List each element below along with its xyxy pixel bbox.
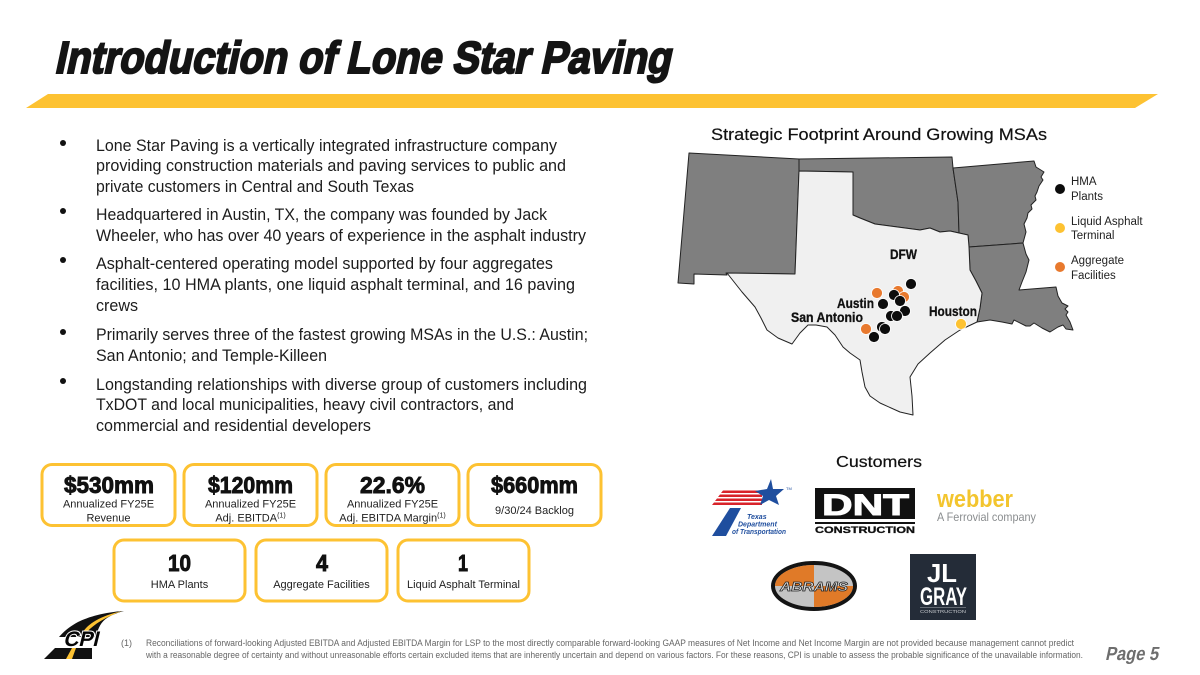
page number: Page 5 [1104,644,1162,665]
legend: aggregate facilities: Facilities [1071,270,1116,282]
bullet 1: private customers in Central and South Texas [96,177,414,196]
logo: JL Gray: CONSTRUCTION [920,609,966,614]
bullet 2 [60,205,586,245]
stat: revenue: $530mm [64,472,154,498]
customers heading: Customers [836,454,922,471]
bullet 3: facilities, 10 HMA plants, one liquid asphalt terminal, and 16 paving [96,275,575,294]
stat: adj. EBITDA margin: 22.6% [360,472,425,498]
map: city labels: Austin [837,295,874,311]
legend: liquid asphalt terminal [1055,216,1143,242]
footnote: with a reasonable degree of certainty and without unreasonable efforts certain excluded items that are inherently uncertain and depend on various factors. For these reasons, CPI is unable to assess the probable significance of the unavailable information. [145,650,1083,660]
map legend [1055,176,1143,282]
legend: aggregate facilities: Aggregate [1071,255,1124,267]
legend: aggregate facilities [1055,255,1124,282]
stat: adj. EBITDA: (1) [277,512,286,520]
stat: revenue [42,464,175,526]
stat: backlog: 9/30/24 Backlog [495,505,574,517]
bullet 3 [60,254,575,315]
footnote [121,638,1083,660]
map: city labels: Houston [929,303,977,319]
legend: liquid asphalt terminal: Liquid Asphalt [1071,216,1143,228]
stat: liquid asphalt terminal: 1 [458,550,468,576]
map [678,153,1073,415]
stat cards row 2 [114,540,529,601]
logo: Abrams [773,563,855,609]
stat: liquid asphalt terminal: Liquid Asphalt Terminal [407,579,520,591]
stat: adj. EBITDA margin [326,464,459,526]
stat: liquid asphalt terminal [398,540,529,601]
logo: TxDOT: Texas [747,514,767,521]
logo: JL Gray: GRAY [920,583,967,611]
stat: HMA plants [114,540,245,601]
bullet 4 [60,325,588,365]
logo: TxDOT: Department [738,522,778,528]
stat: aggregate facilities: 4 [316,550,328,576]
bullet 1: Lone Star Paving is a vertically integrated infrastructure company [96,136,557,155]
legend: HMA plants: HMA [1071,176,1097,188]
CPI logo [44,611,124,659]
bullet 4: Primarily serves three of the fastest growing MSAs in the U.S.: Austin; [96,325,588,344]
map heading: Strategic Footprint Around Growing MSAs [711,125,1047,144]
stat: backlog: $660mm [491,472,578,498]
map: neighbouring states [678,153,1073,332]
stat: HMA plants: HMA Plants [151,579,209,591]
logo: TxDOT: of Transportation [732,529,786,536]
map: yellow terminal dot [956,318,966,330]
stat: adj. EBITDA [184,464,317,526]
customer logos [712,479,1036,620]
stat: adj. EBITDA: Adj. EBITDA [215,512,277,524]
stat: revenue: Revenue [86,512,131,524]
stat: aggregate facilities: Aggregate Facilities [273,579,370,591]
bullet 3: Asphalt-centered operating model supported by four aggregates [96,254,553,273]
bullet 3: crews [96,296,138,315]
bullet 5: Longstanding relationships with diverse group of customers including [96,375,587,394]
bullet 1 [60,136,566,196]
logo: JL Gray [910,554,976,620]
bullet list [60,136,588,435]
stat: HMA plants: 10 [168,550,191,576]
stat: adj. EBITDA: Annualized FY25E [205,498,296,510]
stat: aggregate facilities [256,540,387,601]
stat: adj. EBITDA margin: Annualized FY25E [347,498,438,510]
logo: webber [936,486,1036,524]
logo: Abrams: ABRAMS [779,579,848,594]
bullet 4: San Antonio; and Temple-Killeen [96,346,327,365]
bullet 2: Headquartered in Austin, TX, the company was founded by Jack [96,205,547,224]
logo: webber: A Ferrovial company [937,510,1036,524]
logo: TxDOT: TM [786,486,792,491]
footnote: Reconciliations of forward-looking Adjusted EBITDA and Adjusted EBITDA Margin for LSP to the most directly comparable forward-looking GAAP measures of Net Income and Net Income Margin are not provided because management cannot predict [146,638,1074,648]
logo: DNT Construction: DNT [822,489,909,522]
stat: revenue: Annualized FY25E [63,498,154,510]
logo: DNT Construction: CONSTRUCTION [815,525,915,535]
bullet 5: TxDOT and local municipalities, heavy civil contractors, and [96,395,514,414]
CPI logo: CPI [62,627,103,651]
logo: DNT Construction [815,488,915,535]
stat: adj. EBITDA margin: Adj. EBITDA Margin [339,512,437,524]
bullet 5 [60,375,587,435]
legend: HMA plants [1055,176,1103,203]
map: city labels [791,246,977,325]
title accent bar [26,94,1158,108]
map: orange aggregate dots [860,286,910,334]
stat cards row 1 [42,464,601,526]
footnote: (1) [121,638,132,648]
map: city labels: DFW [890,246,918,262]
bullet 5: commercial and residential developers [96,416,371,435]
logo: TxDOT [712,479,792,536]
logo: JL Gray: JL [927,558,957,588]
map: black HMA dots [868,278,916,342]
stat: backlog [468,464,601,526]
map: city labels: San Antonio [791,309,863,325]
bullet 1: providing construction materials and paving services to public and [96,156,566,175]
logo: webber: webber [936,486,1013,513]
legend: HMA plants: Plants [1071,191,1103,203]
map: Texas [727,171,982,415]
stat: adj. EBITDA margin: (1) [437,512,446,520]
stat: adj. EBITDA: $120mm [208,472,293,498]
legend: liquid asphalt terminal: Terminal [1071,230,1114,242]
bullet 2: Wheeler, who has over 40 years of experience in the asphalt industry [96,226,586,245]
title: Introduction of Lone Star Paving [52,32,679,83]
